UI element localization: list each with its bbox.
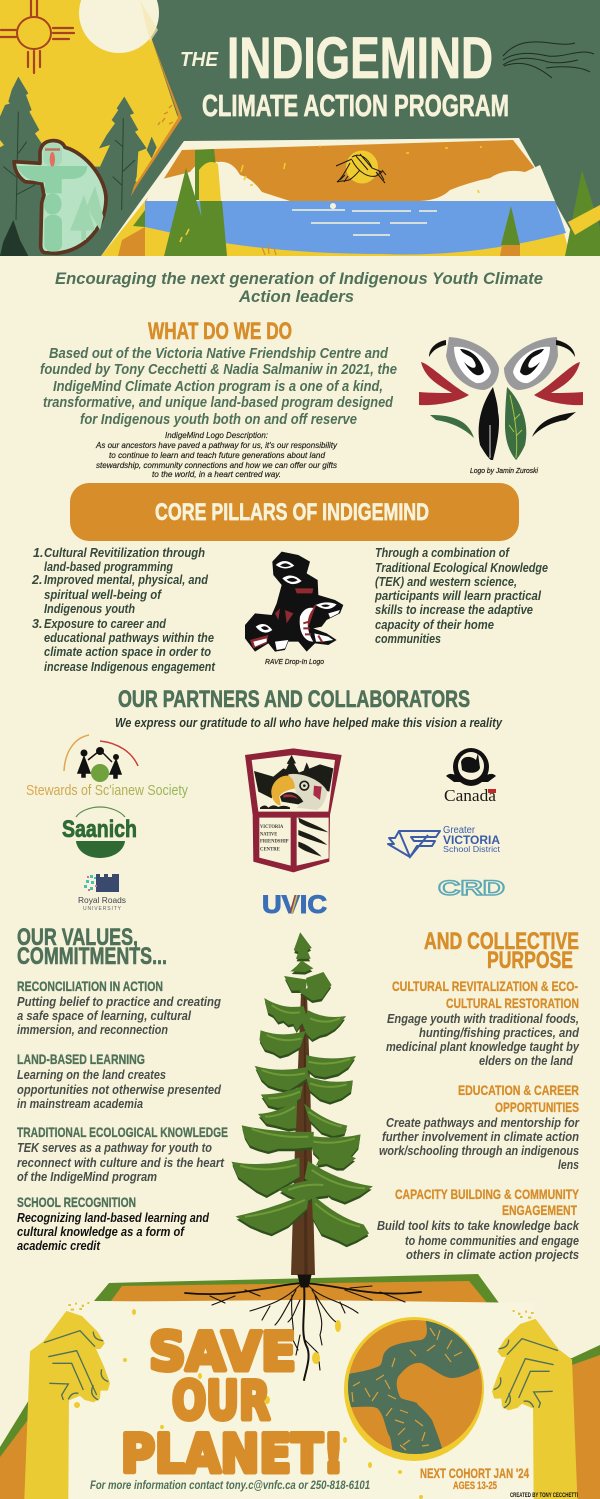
heading: save our planet: PLANET! bbox=[121, 1424, 344, 1485]
heading: our values bbox=[17, 924, 167, 970]
TEK paragraph: communities bbox=[375, 632, 441, 646]
purpose: education and career: lens bbox=[558, 1158, 579, 1172]
logo: Saanich: Saanich bbox=[62, 816, 137, 843]
title bbox=[180, 26, 509, 123]
logo: Royal Roads University: UNIVERSITY bbox=[83, 906, 122, 912]
program description bbox=[40, 346, 397, 428]
icon: tree roots bbox=[185, 1275, 421, 1380]
TEK paragraph: Through a combination of bbox=[375, 546, 511, 560]
icon: totem badge bbox=[14, 141, 106, 253]
right hand bbox=[493, 1310, 577, 1499]
purpose: cultural revitalization: elders on the land bbox=[479, 1054, 573, 1068]
logo: Victoria Native Friendship Centre crest: NATIVE bbox=[260, 833, 278, 838]
banner: core pillars bbox=[70, 483, 519, 541]
value: traditional ecological knowledge: TEK serves as a pathway for youth to bbox=[17, 1141, 212, 1155]
program description: founded by Tony Cecchetti & Nadia Salmaniw in 2021, the bbox=[40, 362, 397, 378]
TEK paragraph: (TEK) and western science, bbox=[375, 575, 517, 589]
RAVE logo caption: RAVE Drop-In Logo bbox=[265, 659, 324, 666]
purpose: cultural revitalization: Engage youth with traditional foods, bbox=[387, 1012, 579, 1026]
tagline: Action leaders bbox=[238, 287, 354, 306]
TEK paragraph bbox=[374, 546, 548, 646]
value: land-based learning: Learning on the land creates bbox=[17, 1068, 166, 1082]
value: reconciliation in action: Putting belief to practice and creating bbox=[17, 995, 221, 1009]
header banner bbox=[0, 0, 600, 256]
logo: Government of Canada: Canada bbox=[444, 786, 496, 805]
purpose: capacity building: others in climate action projects bbox=[406, 1248, 579, 1262]
logo: Stewards of Sc'ianew Society: Stewards of Sc'ianew Society bbox=[26, 782, 188, 799]
left pine trees bbox=[0, 77, 157, 256]
core pillars list: Exposure to career and bbox=[44, 617, 166, 631]
heading: partners: OUR PARTNERS AND COLLABORATORS bbox=[118, 686, 470, 713]
value: traditional ecological knowledge: of the IndigeMind program bbox=[17, 1170, 157, 1184]
purpose: capacity building: Build tool kits to take knowledge back bbox=[377, 1219, 580, 1233]
banner: core pillars: CORE PILLARS OF INDIGEMIND bbox=[155, 499, 429, 526]
tree bbox=[232, 933, 372, 1275]
core pillars list: land-based programming bbox=[44, 560, 173, 574]
program description: Based out of the Victoria Native Friendship Centre and bbox=[49, 346, 389, 362]
logo description: IndigeMind Logo Description: bbox=[165, 431, 268, 440]
core pillars list: 2. bbox=[31, 573, 42, 587]
logo description: to continue to learn and teach future generations about land bbox=[109, 451, 326, 460]
splatter dots bbox=[74, 1309, 423, 1499]
logo description: As our ancestors have paved a pathway for us, it's our responsibility bbox=[95, 441, 338, 450]
next cohort callout: NEXT COHORT JAN '24 bbox=[420, 1465, 529, 1481]
value: school recognition: Recognizing land-based learning and bbox=[17, 1211, 209, 1225]
RAVE drop-in logo bbox=[245, 552, 343, 652]
title: THE bbox=[180, 49, 219, 71]
core pillars list: Cultural Revitilization through bbox=[44, 546, 205, 560]
logo: Stewards of Sc'ianew Society bbox=[26, 735, 188, 799]
value: reconciliation in action: immersion, and reconnection bbox=[17, 1023, 168, 1037]
value: traditional ecological knowledge bbox=[17, 1124, 228, 1184]
heading: collective purpose bbox=[424, 928, 579, 974]
value: traditional ecological knowledge: reconnect with culture and is the heart bbox=[17, 1156, 225, 1170]
logo description bbox=[95, 431, 338, 479]
core pillars list: Improved mental, physical, and bbox=[44, 573, 208, 587]
TEK paragraph: Traditional Ecological Knowledge bbox=[375, 561, 548, 575]
icon: hummingbird on sun bbox=[336, 150, 386, 184]
contact line: For more information contact tony.c@vnfc.ca or 250-818-6101 bbox=[90, 1480, 370, 1492]
IndigeMind logo bbox=[419, 337, 583, 460]
program description: IndigeMind Climate Action program is a one of a kind, bbox=[53, 379, 383, 395]
value: traditional ecological knowledge: TRADITIONAL ECOLOGICAL KNOWLEDGE bbox=[17, 1124, 228, 1140]
value: land-based learning bbox=[17, 1051, 221, 1111]
next cohort callout bbox=[420, 1465, 529, 1492]
heading: our values: COMMITMENTS... bbox=[17, 943, 167, 970]
icon: wavy postmark lines bbox=[503, 42, 594, 78]
value: reconciliation in action bbox=[17, 978, 221, 1037]
value: reconciliation in action: a safe space of learning, cultural bbox=[17, 1009, 191, 1023]
core pillars list: educational pathways within the bbox=[44, 631, 214, 645]
tagline bbox=[55, 269, 543, 306]
icon: globe bbox=[340, 1317, 484, 1461]
core pillars list: increase Indigenous engagement bbox=[44, 660, 216, 674]
water bbox=[101, 201, 570, 256]
logo: Victoria Native Friendship Centre crest: FRIENDSHIP bbox=[260, 840, 289, 845]
logo description: to the world, in a heart centred way. bbox=[152, 470, 281, 479]
logo: Royal Roads University bbox=[78, 874, 126, 912]
value: land-based learning: in mainstream academia bbox=[17, 1097, 143, 1111]
value: school recognition: cultural knowledge as a form of bbox=[17, 1225, 186, 1239]
logo: Victoria Native Friendship Centre crest bbox=[245, 748, 342, 872]
logo caption: Logo by Jamin Zuroski bbox=[470, 468, 538, 475]
value: school recognition: academic credit bbox=[17, 1239, 101, 1253]
logo: UVic: UVIC bbox=[262, 891, 327, 919]
bottom poster backdrop bbox=[0, 1274, 600, 1499]
logo: Greater Victoria School District: Greater bbox=[443, 825, 476, 836]
purpose: capacity building: ENGAGEMENT bbox=[502, 1202, 577, 1218]
core pillars list bbox=[31, 546, 216, 674]
title: INDIGEMIND bbox=[227, 26, 493, 91]
core pillars list: spiritual well-being of bbox=[44, 588, 163, 602]
heading: our values: OUR VALUES, bbox=[17, 924, 138, 951]
dots bbox=[180, 146, 482, 242]
core pillars list: 1. bbox=[33, 546, 43, 560]
logo: Victoria Native Friendship Centre crest: CENTRE bbox=[260, 847, 281, 852]
logo: Saanich bbox=[62, 807, 137, 858]
TEK paragraph: participants will learn practical bbox=[374, 589, 541, 603]
landscape scene bbox=[101, 138, 600, 256]
tagline: Encouraging the next generation of Indigenous Youth Climate bbox=[55, 269, 543, 288]
purpose: cultural revitalization bbox=[386, 978, 580, 1068]
TEK paragraph: skills to increase the adaptive bbox=[375, 603, 533, 617]
next cohort callout: AGES 13-25 bbox=[453, 1480, 497, 1492]
core pillars list: climate action space in order to bbox=[44, 645, 211, 659]
purpose: education and career bbox=[379, 1082, 580, 1172]
heading: save our planet: SAVE bbox=[149, 1322, 296, 1383]
yellow sky panel bbox=[0, 0, 182, 197]
logo description: stewardship, community connections and how we can offer our gifts bbox=[96, 461, 337, 470]
core pillars list: 3. bbox=[32, 617, 42, 631]
TEK paragraph: capacity of their home bbox=[375, 618, 494, 632]
program description: transformative, and unique land-based program designed bbox=[43, 395, 394, 411]
gratitude line: We express our gratitude to all who have helped make this vision a reality bbox=[115, 716, 503, 730]
icon: zia sun symbol bbox=[0, 0, 74, 73]
logo: CRD: CRD bbox=[438, 877, 505, 900]
clouds bbox=[145, 161, 555, 203]
logo: Greater Victoria School District: VICTORIA bbox=[443, 833, 500, 847]
logo: Greater Victoria School District bbox=[388, 825, 501, 857]
value: land-based learning: LAND-BASED LEARNING bbox=[17, 1051, 145, 1067]
program description: for Indigenous youth both on and off reserve bbox=[80, 412, 357, 428]
value: school recognition: SCHOOL RECOGNITION bbox=[17, 1194, 136, 1210]
logo: Royal Roads University: Royal Roads bbox=[78, 895, 126, 905]
purpose: education and career: further involvement in climate action bbox=[382, 1130, 579, 1144]
value: land-based learning: opportunities not otherwise presented bbox=[17, 1083, 221, 1097]
value: school recognition bbox=[17, 1194, 209, 1253]
logo: Victoria Native Friendship Centre crest: VICTORIA bbox=[260, 825, 284, 830]
purpose: cultural revitalization: medicinal plant knowledge taught by bbox=[386, 1040, 580, 1054]
heading: what do we do: WHAT DO WE DO bbox=[148, 318, 292, 345]
left hand bbox=[25, 1302, 109, 1499]
purpose: capacity building bbox=[377, 1186, 580, 1262]
logo: Greater Victoria School District: School District bbox=[443, 844, 501, 854]
logo: Government of Canada bbox=[444, 748, 496, 805]
heading: save our planet: OUR bbox=[172, 1371, 270, 1432]
heading: save our planet bbox=[121, 1322, 344, 1485]
core pillars list: Indigenous youth bbox=[44, 602, 135, 616]
purpose: education and career: Create pathways and mentorship for bbox=[386, 1116, 580, 1130]
purpose: cultural revitalization: hunting/fishing practices, and bbox=[419, 1026, 579, 1040]
value: reconciliation in action: RECONCILIATION IN ACTION bbox=[17, 978, 163, 994]
